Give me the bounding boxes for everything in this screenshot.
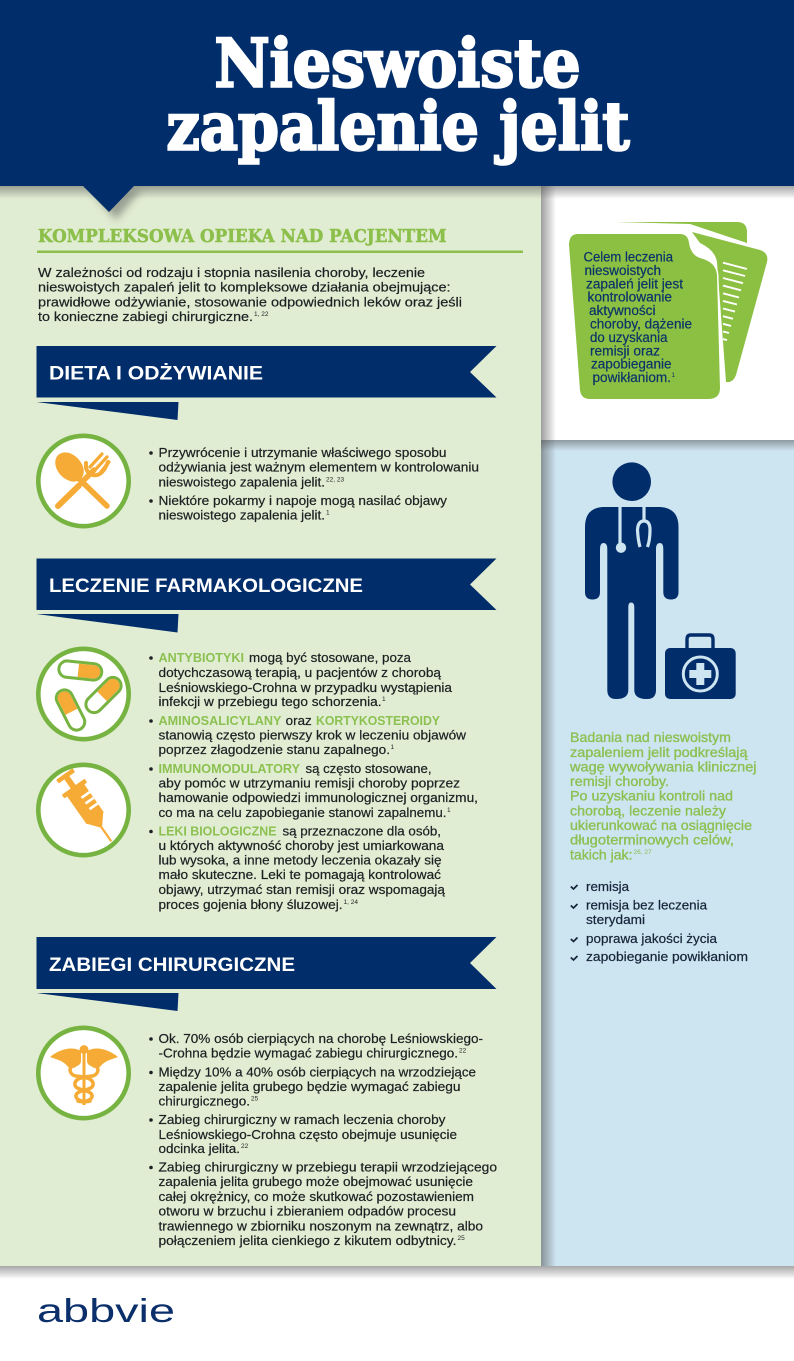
text: pharmacological bullets: dotychczasową terapią, u pacjentów z chorobą	[158, 665, 442, 680]
text: research statement: remisji choroby.	[570, 774, 669, 789]
text: diet bullets: Przywrócenie i utrzymanie właściwego sposobu	[158, 445, 446, 460]
text: pharmacological bullets: u których aktywność choroby jest umiarkowana	[158, 838, 445, 853]
checklist: long-term goals: poprawa jakości życia	[586, 931, 718, 946]
text: diet bullets: 1	[326, 510, 330, 516]
callout: treatment goal documents: zapaleń jelit jest	[586, 276, 683, 292]
intro text: nieswoistych zapaleń jelit to kompleksowe działania obejmujące:	[38, 280, 450, 294]
text: research statement: 26, 27	[634, 849, 652, 856]
text: research statement: wagę wywoływania klinicznej	[569, 760, 756, 774]
text: surgery bullets: odcinka jelita.	[158, 1141, 240, 1156]
intro text: 1, 22	[254, 311, 269, 318]
callout: treatment goal documents: choroby, dążenie	[590, 316, 692, 332]
text: pharmacological bullets: mogą być stosowane, poza	[249, 650, 412, 665]
text: pharmacological bullets: ANTYBIOTYKI	[158, 650, 244, 665]
text: pharmacological bullets: IMMUNOMODULATORY	[158, 761, 300, 776]
checklist: long-term goals: remisja bez leczenia	[586, 898, 708, 912]
text: pharmacological bullets: AMINOSALICYLANY	[158, 713, 282, 728]
text: pharmacological bullets: 1	[390, 744, 394, 751]
callout: treatment goal documents: zapobieganie	[591, 356, 672, 372]
text: diet bullets: nieswoistego zapalenia jelit.	[158, 508, 325, 522]
text: surgery bullets: 25	[251, 1096, 259, 1102]
text: diet bullets: odżywiania jest ważnym elementem w kontrolowaniu	[158, 460, 479, 474]
text: pharmacological bullets: KORTYKOSTEROIDY	[316, 713, 440, 728]
text: research statement: chorobą, leczenie należy	[570, 804, 726, 818]
icon: doctor with stethoscope	[585, 462, 736, 699]
text: diet bullets: nieswoistego zapalenia jelit.	[158, 474, 325, 490]
section heading: comprehensive care: KOMPLEKSOWA OPIEKA NAD PACJENTEM	[38, 227, 446, 247]
ribbon: diet: DIETA I ODŻYWIANIE	[49, 364, 263, 384]
text: surgery bullets: 22	[459, 1048, 467, 1054]
header banner	[0, 0, 794, 220]
text: pharmacological bullets: 1	[382, 696, 386, 703]
text: research statement: Badania nad nieswoistym	[570, 730, 731, 745]
text: surgery bullets: Leśniowskiego-Crohna często obejmuje usunięcie	[158, 1127, 457, 1142]
text: surgery bullets: otworu w brzuchu i zbieraniem odpadów procesu	[158, 1204, 456, 1218]
text: surgery bullets: całej okrężnicy, co może skutkować pozostawieniem	[158, 1189, 474, 1204]
callout: treatment goal documents: 1	[672, 372, 676, 379]
text: surgery bullets: -Crohna będzie wymagać zabiegu chirurgicznego.	[158, 1046, 458, 1060]
callout: treatment goal documents	[569, 222, 767, 399]
title: zapalenie jelit	[166, 88, 630, 166]
title	[166, 24, 630, 166]
text: research statement: zapaleniem jelit podkreślają	[570, 745, 748, 760]
callout: treatment goal documents: nieswoistych	[584, 263, 661, 278]
text: diet bullets: 22, 23	[326, 476, 344, 484]
text: surgery bullets: trawiennego w zbiorniku noszonym na zewnątrz, albo	[158, 1218, 483, 1234]
text: research statement: ukierunkować na osiągnięcie	[570, 818, 752, 833]
checklist: long-term goals: zapobieganie powikłaniom	[586, 949, 748, 964]
text: research statement: takich jak:	[570, 848, 632, 862]
text: diet bullets: Niektóre pokarmy i napoje mogą nasilać objawy	[158, 493, 447, 508]
text: surgery bullets: 25	[458, 1235, 465, 1242]
callout: treatment goal documents: do uzyskania	[590, 330, 668, 345]
text: pharmacological bullets	[149, 650, 478, 912]
icon: medical kit	[665, 635, 736, 699]
text: surgery bullets: Ok. 70% osób cierpiących na chorobę Leśniowskiego-	[158, 1031, 483, 1046]
text: pharmacological bullets: 1, 24	[344, 899, 358, 906]
callout: treatment goal documents: powikłaniom.	[592, 370, 671, 385]
text: research statement	[569, 730, 756, 862]
ribbon: pharmacological treatment: LECZENIE FARMAKOLOGICZNE	[49, 576, 363, 597]
text: surgery bullets: Zabieg chirurgiczny w ramach leczenia choroby	[158, 1112, 446, 1127]
intro text: to konieczne zabiegi chirurgiczne.	[38, 309, 253, 324]
text: pharmacological bullets: mało skuteczne. Leki te pomagają kontrolować	[158, 867, 441, 882]
checklist: long-term goals: remisja	[586, 879, 630, 894]
ribbon: surgery: ZABIEGI CHIRURGICZNE	[49, 955, 295, 976]
text: research statement: długoterminowych celów,	[570, 832, 734, 848]
icon: syringe	[38, 765, 129, 855]
text: pharmacological bullets: infekcji w przebiegu tego schorzenia.	[158, 694, 382, 709]
intro text: prawidłowe odżywianie, stosowanie odpowiednich leków oraz jeśli	[38, 294, 462, 310]
text: surgery bullets: 22	[241, 1143, 249, 1150]
text: surgery bullets: Zabieg chirurgiczny w przebiegu terapii wrzodziejącego	[158, 1160, 497, 1174]
panel: doctor background	[541, 440, 794, 1266]
text: surgery bullets: chirurgicznego.	[158, 1094, 250, 1108]
text: pharmacological bullets: są przeznaczone dla osób,	[282, 824, 441, 838]
text: pharmacological bullets: co ma na celu zapobieganie stanowi zapalnemu.	[158, 805, 446, 820]
callout: treatment goal documents: remisji oraz	[590, 344, 660, 358]
text: surgery bullets: Między 10% a 40% osób cierpiących na wrzodziejące	[158, 1064, 476, 1080]
checklist: long-term goals	[571, 879, 748, 964]
text: pharmacological bullets: są często stosowane,	[306, 761, 432, 776]
intro text: W zależności od rodzaju i stopnia nasilenia choroby, leczenie	[38, 265, 425, 280]
text: research statement: Po uzyskaniu kontroli nad	[570, 788, 733, 804]
icon: capsules	[38, 649, 129, 739]
text: surgery bullets: zapalenie jelita grubego będzie wymagać zabiegu	[158, 1079, 460, 1094]
icon: spoon and fork	[38, 436, 129, 526]
panel: care background	[0, 186, 541, 1266]
ribbon: surgery	[36, 937, 496, 1011]
callout: treatment goal documents: Celem leczenia	[584, 250, 673, 264]
text: pharmacological bullets: hamowanie odpowiedzi immunologicznej organizmu,	[158, 790, 478, 805]
text: surgery bullets: połączeniem jelita cienkiego z kikutem odbytnicy.	[158, 1233, 456, 1248]
text: pharmacological bullets: proces gojenia błony śluzowej.	[158, 897, 342, 912]
text: pharmacological bullets: aby pomóc w utrzymaniu remisji choroby poprzez	[158, 776, 460, 790]
text: surgery bullets: zapalenia jelita grubego może obejmować usunięcie	[158, 1174, 473, 1189]
ribbon: pharmacological treatment	[36, 558, 496, 632]
text: pharmacological bullets: oraz	[286, 713, 312, 728]
text: pharmacological bullets: poprzez złagodzenie stanu zapalnego.	[158, 742, 390, 757]
ribbon: diet	[36, 346, 496, 420]
text: surgery bullets	[149, 1031, 497, 1248]
text: pharmacological bullets: 1	[447, 807, 451, 814]
text: pharmacological bullets: LEKI BIOLOGICZNE	[158, 824, 277, 838]
intro text	[38, 265, 462, 324]
icon: caduceus	[38, 1028, 129, 1118]
text: diet bullets	[149, 445, 479, 522]
text: pharmacological bullets: Leśniowskiego-Crohna w przypadku wystąpienia	[158, 680, 453, 695]
text: pharmacological bullets: stanowią często pierwszy krok w leczeniu objawów	[158, 728, 466, 742]
title: Nieswoiste	[214, 24, 580, 102]
callout: treatment goal documents: kontrolowanie	[588, 290, 672, 304]
text: pharmacological bullets: lub wysoka, a inne metody leczenia okazały się	[158, 852, 442, 868]
callout: treatment goal documents: aktywności	[589, 303, 656, 318]
checklist: long-term goals: sterydami	[586, 912, 645, 927]
logo: abbvie: abbvie	[37, 1292, 175, 1329]
text: pharmacological bullets: objawy, utrzymać stan remisji oraz wspomagają	[158, 882, 446, 897]
